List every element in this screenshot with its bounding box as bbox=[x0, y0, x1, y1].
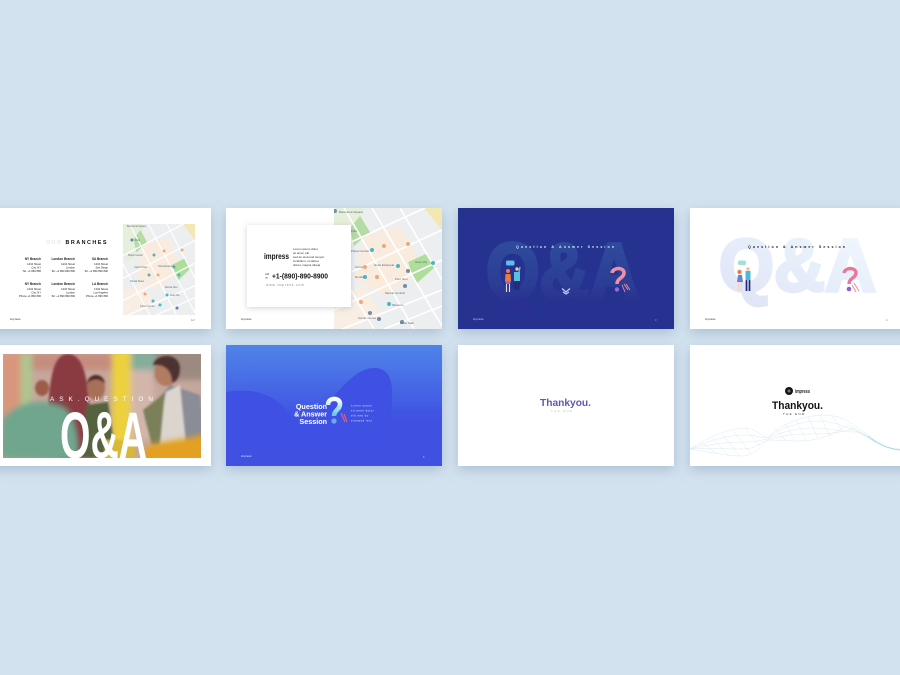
phone number: +1-(890)-890-8900 bbox=[272, 272, 328, 280]
branch list: London Branch bbox=[51, 257, 75, 261]
side text: eiusmod text bbox=[351, 418, 372, 422]
map: Park bbox=[351, 229, 358, 233]
illustration: two people talking bbox=[505, 260, 520, 292]
page number: 3 bbox=[655, 318, 657, 322]
footer logo: impress bbox=[241, 454, 252, 458]
slide: dark Q&A bbox=[458, 208, 674, 329]
map: Ronda bbox=[355, 275, 364, 279]
address text: incididunt, ut labore bbox=[293, 259, 319, 263]
map: Carrer Centre bbox=[358, 316, 377, 320]
branch list: SA Branch bbox=[92, 257, 108, 261]
footer logo: impress bbox=[10, 317, 21, 321]
heading: & Answer bbox=[294, 410, 327, 418]
map: Carrer Centre bbox=[140, 305, 155, 308]
map: Park bbox=[135, 239, 141, 242]
large Q&A letters: Q&A bbox=[486, 227, 639, 316]
phone number: call bbox=[265, 272, 269, 276]
slide: ask question photo bbox=[0, 345, 211, 472]
map: Carrer bbox=[355, 265, 364, 269]
icon: chevron bbox=[562, 288, 570, 294]
heading: thankyou: Thankyou. bbox=[772, 400, 823, 412]
side text bbox=[351, 404, 374, 422]
address text: sed do eiusmod tempor bbox=[293, 255, 324, 259]
side text: sit amet dolor bbox=[351, 408, 374, 412]
branch list: London Branch bbox=[51, 282, 75, 286]
large Q&A text: Q&A bbox=[60, 398, 147, 472]
map bbox=[123, 224, 195, 315]
slide: thank you wave bbox=[690, 345, 900, 466]
heading: ask question: ASK.QUESTION bbox=[50, 396, 153, 403]
branch list: 1234 Street bbox=[94, 287, 108, 291]
background wave bbox=[226, 368, 392, 408]
branch list: 1234 Street bbox=[61, 287, 75, 291]
logo: impress bbox=[795, 389, 810, 395]
icon: question mark bbox=[328, 399, 347, 424]
subtitle: THE END bbox=[551, 409, 573, 413]
branch list bbox=[19, 257, 109, 298]
map: Carrer Hotel bbox=[134, 266, 147, 269]
wave mesh bbox=[690, 415, 900, 456]
page number: 1/2 bbox=[191, 318, 195, 322]
map: Barcelona Square bbox=[339, 210, 363, 214]
branch list: Los Angeles bbox=[93, 290, 109, 294]
logo: impress: impress bbox=[264, 252, 289, 261]
map: Hotel Eixample bbox=[158, 265, 175, 268]
subtitle: THE END bbox=[783, 412, 805, 416]
map: Hotel Sant bbox=[400, 321, 414, 325]
slide: light Q&A bbox=[690, 208, 900, 329]
slide: question and answer session bbox=[226, 345, 442, 466]
branch list: LA Branch bbox=[92, 282, 108, 286]
map: Mercat Nou bbox=[165, 286, 178, 289]
page number: 6 bbox=[423, 455, 425, 459]
map: Plaça Central bbox=[351, 249, 369, 253]
map: Parc Nou bbox=[395, 277, 408, 281]
website: www.impress.com bbox=[266, 283, 305, 287]
map: Hotel Eixample bbox=[374, 263, 395, 267]
map bbox=[334, 208, 442, 329]
branch list: Phone +1 890 890 bbox=[86, 294, 109, 298]
footer logo: impress bbox=[241, 317, 252, 321]
footer logo: impress bbox=[473, 317, 484, 321]
photo bbox=[3, 354, 201, 458]
phone number: us bbox=[265, 276, 268, 280]
address text bbox=[293, 247, 324, 267]
branch list: London bbox=[66, 266, 76, 270]
map: Mercat Central bbox=[385, 291, 405, 295]
branch list: NY Branch bbox=[25, 282, 41, 286]
icon: question mark bbox=[844, 268, 859, 292]
illustration: two people talking bbox=[737, 260, 750, 291]
subtitle: Question & Answer Session bbox=[516, 245, 614, 249]
branch list: Phone +1 890 890 bbox=[19, 294, 42, 298]
heading: Question bbox=[296, 402, 327, 411]
map: Gran Via bbox=[170, 294, 180, 297]
branch list: London bbox=[66, 290, 76, 294]
map: Ronda Street bbox=[130, 280, 144, 283]
side text: Lorem ipsum bbox=[351, 404, 372, 408]
branch list: NY Branch bbox=[25, 257, 41, 261]
branch list: City, NY bbox=[31, 290, 41, 294]
map: Plaça Central bbox=[128, 254, 143, 257]
subtitle: Question & Answer Session bbox=[748, 245, 845, 249]
heading: thankyou: Thankyou. bbox=[540, 398, 591, 409]
branch list: 1234 Street bbox=[61, 262, 75, 266]
map: Museum bbox=[392, 303, 404, 307]
slide: contact card bbox=[226, 200, 442, 329]
side text: elit sed do bbox=[351, 414, 369, 418]
branch list: Tel: +1 890 890 bbox=[23, 269, 42, 273]
branch list: 1234 Street bbox=[27, 262, 41, 266]
branch list: Tel: +1 890 890 890 bbox=[84, 269, 109, 273]
heading: Session bbox=[299, 417, 327, 426]
heading bbox=[294, 402, 327, 426]
slide: our branches bbox=[0, 208, 211, 329]
footer logo: impress bbox=[705, 317, 716, 321]
heading: our branches: OUR BRANCHES bbox=[46, 240, 108, 246]
map: Barcelona Square bbox=[127, 225, 147, 228]
branch list: San Diego bbox=[95, 266, 108, 270]
icon: question mark bbox=[612, 268, 630, 292]
branch list: Tel: +1 890 890 890 bbox=[51, 269, 76, 273]
large Q&A letters: Q&A bbox=[719, 224, 876, 307]
branch list: City, NY bbox=[31, 266, 41, 270]
address text: Lorem ipsum dolor, bbox=[293, 247, 319, 251]
slide: thank you purple bbox=[458, 345, 674, 466]
branch list: 1234 Street bbox=[94, 262, 108, 266]
contact card bbox=[247, 225, 351, 307]
page number: 4 bbox=[886, 318, 888, 322]
branch list: 1234 Street bbox=[27, 287, 41, 291]
address text: dolore magna aliqua bbox=[293, 263, 321, 267]
logo bbox=[785, 387, 810, 395]
branch list: Tel: +1 890 890 890 bbox=[51, 294, 76, 298]
map: Gran Via bbox=[415, 260, 427, 264]
address text: sit amet, elit bbox=[293, 251, 309, 255]
